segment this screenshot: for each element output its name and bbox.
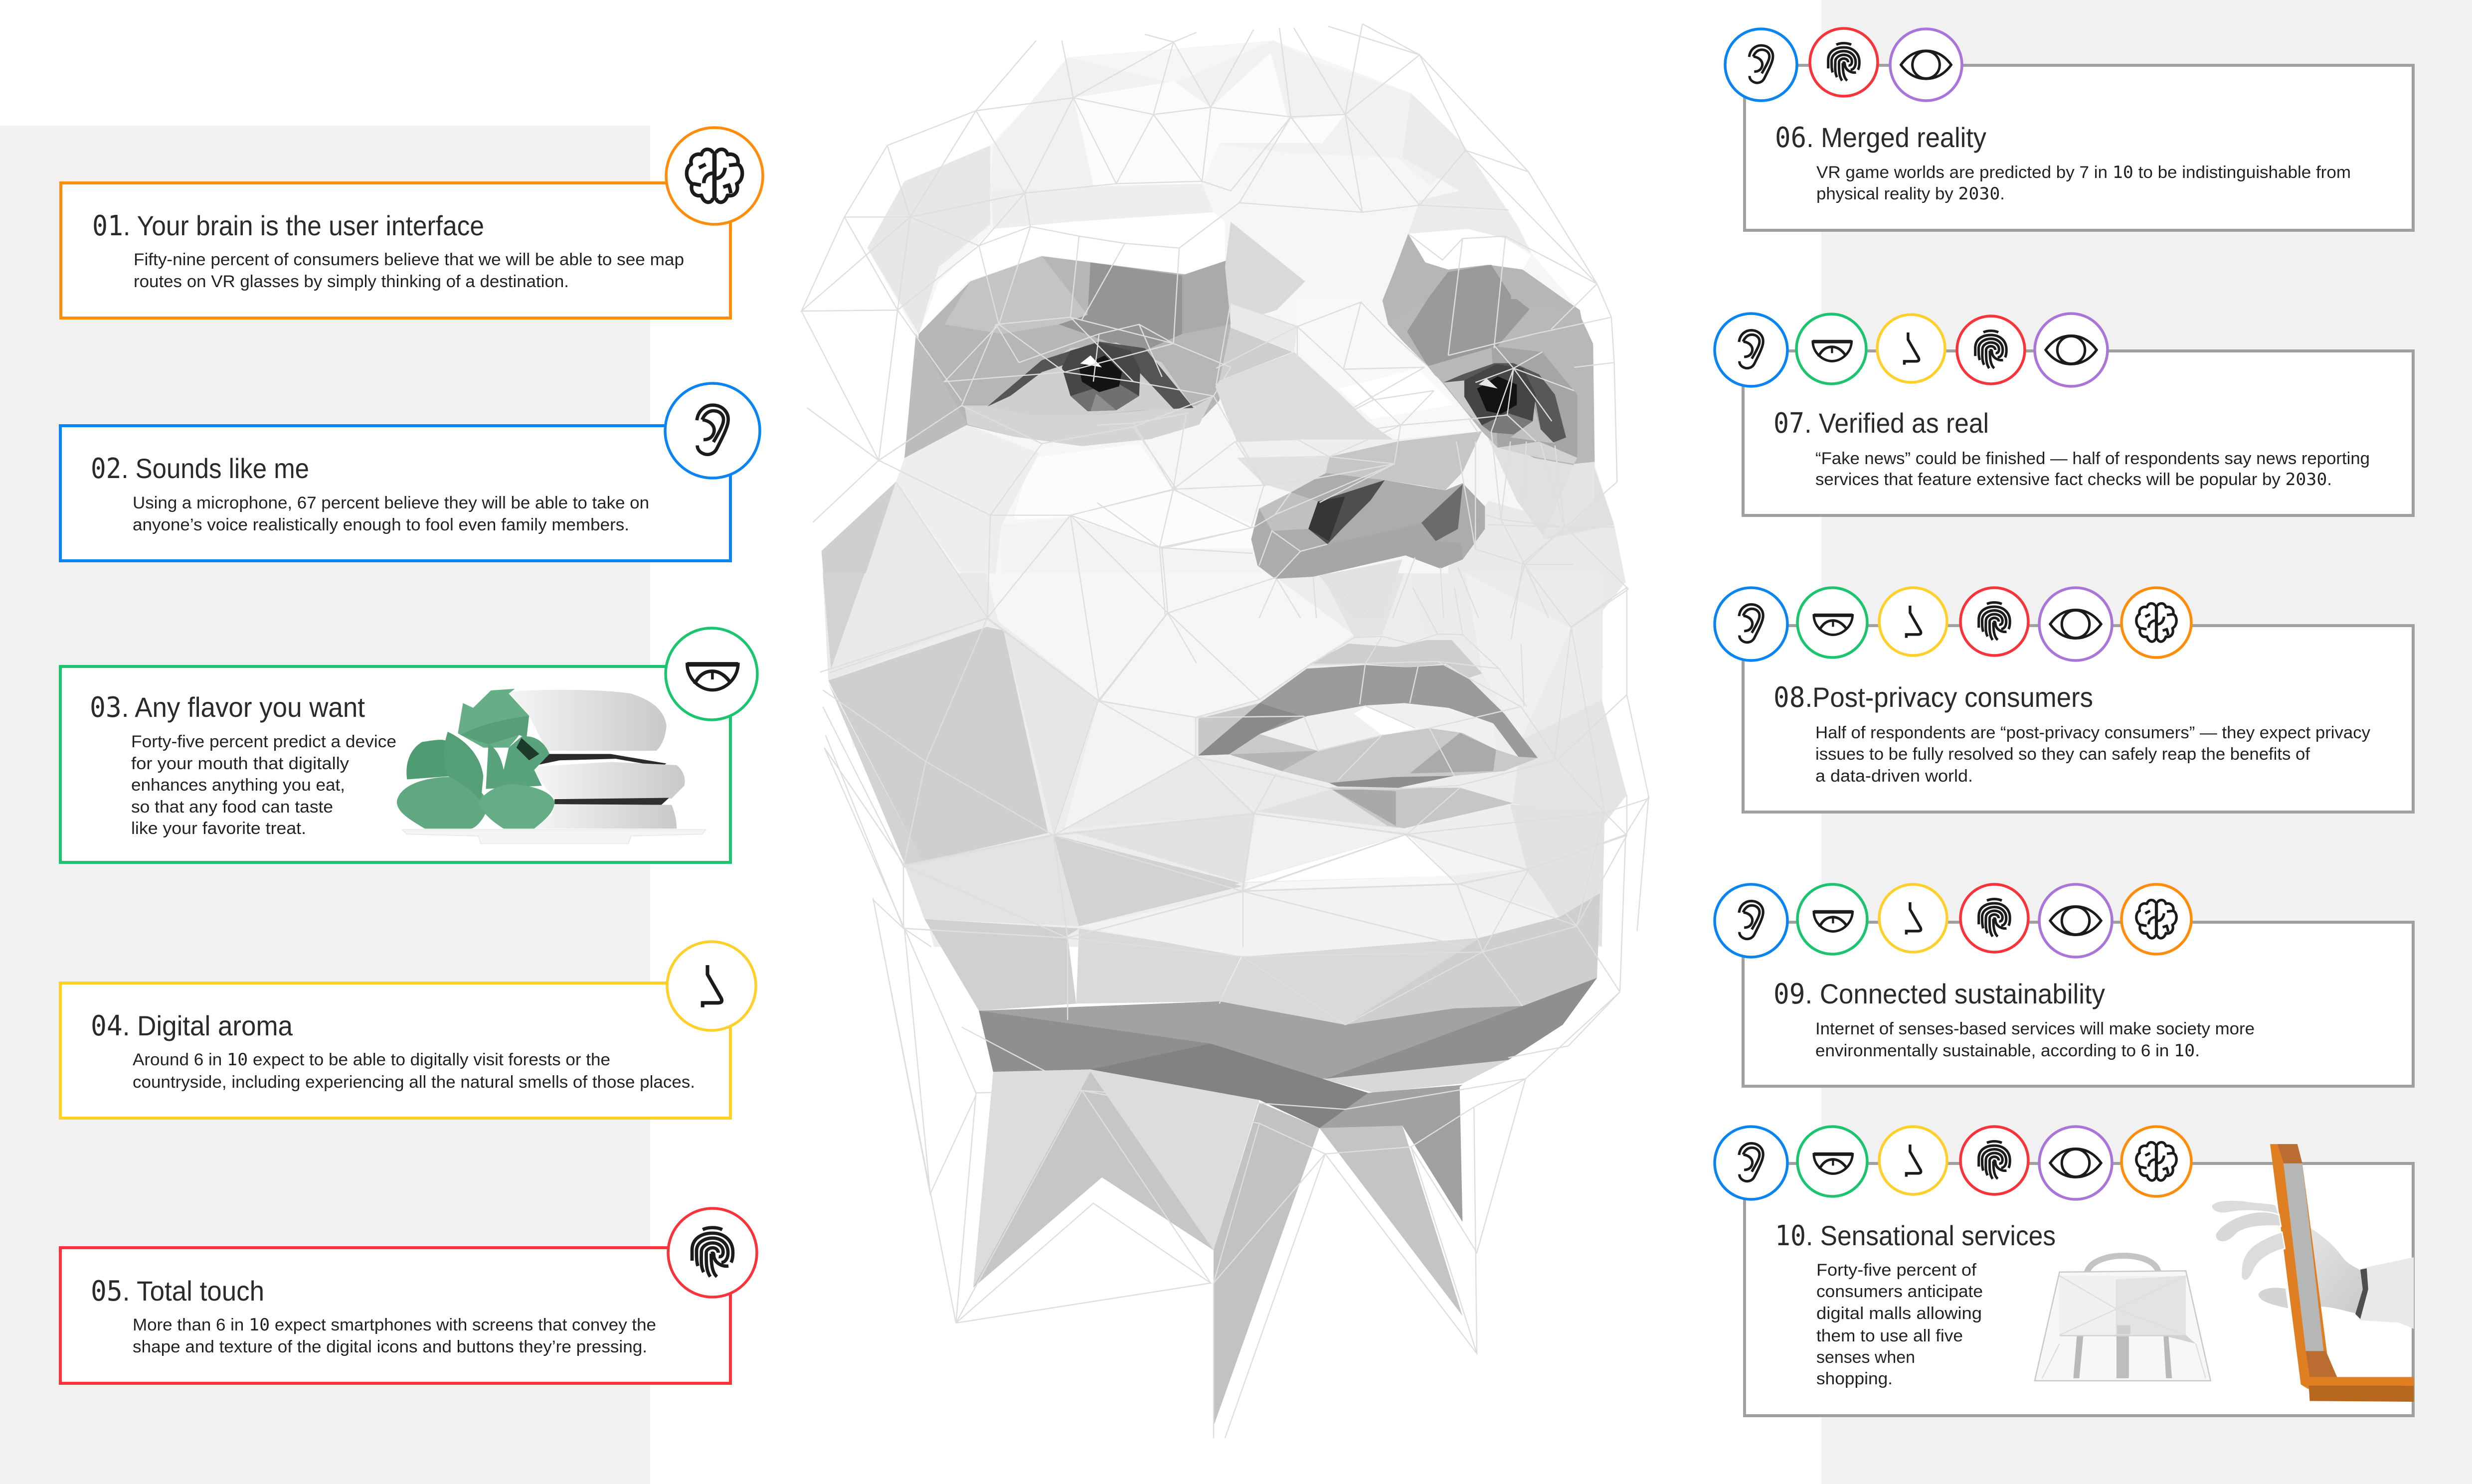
panel: 03 Any flavor you want xyxy=(60,628,757,862)
text block: 07 body: “Fake news” could be finished — half of respondents say news reporting xyxy=(1815,449,2370,468)
text block: 10 body: senses when xyxy=(1816,1348,1915,1367)
face: jaw and neck planes xyxy=(904,834,1600,1426)
heading: 02: 02. Sounds like me xyxy=(91,453,309,485)
face: wireframe mesh, mouth xyxy=(820,588,1649,947)
text block: 04 body: countryside, including experiencing all the natural smells of those places. xyxy=(133,1073,695,1092)
icons: all six senses xyxy=(1715,1127,2191,1199)
heading: 03: 03. Any flavor you want xyxy=(90,691,365,724)
panel: 04 Digital aroma xyxy=(60,942,756,1118)
text block: 02 body xyxy=(133,494,649,534)
icon: nose xyxy=(667,942,756,1030)
heading: 09: 09. Connected sustainability xyxy=(1773,978,2105,1010)
heading: 08: 08.Post-privacy consumers xyxy=(1773,681,2093,714)
heading: 04: 04. Digital aroma xyxy=(91,1010,293,1042)
text block: 10 body xyxy=(1816,1261,1983,1388)
icon: fingerprint xyxy=(668,1208,757,1297)
text block: 03 body: for your mouth that digitally xyxy=(131,754,349,773)
text block: 10 body: shopping. xyxy=(1816,1369,1893,1388)
text block: 09 body: environmentally sustainable, according to 6 in 10. xyxy=(1815,1041,2200,1061)
text block: 08 body xyxy=(1815,723,2370,786)
panel: 10 Sensational services xyxy=(1715,1127,2414,1416)
icons: ear, touch, sight xyxy=(1725,28,1962,101)
icons: all six senses xyxy=(1715,588,2191,660)
icons: ear, mouth, nose, touch, sight xyxy=(1715,314,2108,386)
face: upper planes xyxy=(822,40,1626,748)
icons: all six senses xyxy=(1715,884,2191,957)
text block: 09 body xyxy=(1815,1019,2255,1061)
heading: 06: 06. Merged reality xyxy=(1775,122,1986,154)
face: nose and right eye facets xyxy=(1215,299,1594,618)
text block: 03 body: Forty-five percent predict a device xyxy=(131,732,396,751)
text block: 03 body: so that any food can taste xyxy=(131,798,333,817)
panel: 09 Connected sustainability xyxy=(1715,884,2413,1086)
text block: 07 body xyxy=(1815,449,2370,490)
icon: mouth xyxy=(666,628,757,720)
heading: 07: 07. Verified as real xyxy=(1773,407,1989,440)
text block: 09 body: Internet of senses-based services will make society more xyxy=(1815,1019,2255,1038)
heading: 05: 05. Total touch xyxy=(91,1275,264,1308)
icon: ear xyxy=(665,383,760,478)
face: wireframe mesh, upper xyxy=(801,24,1628,701)
text block: 08 body: Half of respondents are “post-privacy consumers” — they expect privacy xyxy=(1815,723,2370,742)
heading: 01: 01. Your brain is the user interface xyxy=(92,210,484,242)
panel: 08 Post-privacy consumers xyxy=(1715,588,2413,812)
background: right grey panel xyxy=(1821,0,2472,1484)
face: lips xyxy=(1199,640,1538,828)
text block: 10 body: consumers anticipate xyxy=(1816,1282,1983,1301)
face: wireframe mesh, nose and right eye xyxy=(1097,302,1574,618)
right eye socket xyxy=(1542,462,1594,539)
face: cheeks and mouth area planes xyxy=(823,573,1627,947)
text block: 10 body: digital malls allowing xyxy=(1816,1304,1982,1323)
illustration: shopping bag wireframe xyxy=(2035,1256,2211,1381)
text block: 10 body: them to use all five xyxy=(1816,1326,1963,1345)
text block: 04 body xyxy=(133,1050,695,1092)
text block: 03 body: enhances anything you eat, xyxy=(131,776,345,795)
text block: 05 body xyxy=(133,1315,656,1356)
panel: 01 Your brain is the user interface xyxy=(61,128,763,318)
panel: 05 Total touch xyxy=(60,1208,757,1383)
text block: 06 body xyxy=(1816,163,2351,204)
panel: 07 Verified as real xyxy=(1715,314,2413,515)
text block: 06 body: physical reality by 2030. xyxy=(1816,184,2005,204)
text block: 01 body: routes on VR glasses by simply thinking of a destination. xyxy=(134,272,569,291)
text block: 07 body: services that feature extensive fact checks will be popular by 2030. xyxy=(1815,470,2332,490)
background: left grey panel xyxy=(0,126,650,1484)
text block: 08 body: issues to be fully resolved so they can safely reap the benefits of xyxy=(1815,745,2310,764)
text block: 03 body xyxy=(131,732,396,838)
text block: 02 body: Using a microphone, 67 percent believe they will be able to take on xyxy=(133,494,649,512)
panel: 06 Merged reality xyxy=(1725,28,2413,230)
icon: brain xyxy=(666,128,763,224)
text block: 08 body: a data-driven world. xyxy=(1815,767,1973,786)
heading: 10: 10. Sensational services xyxy=(1775,1220,2056,1252)
face: eye sockets, bridge and left eye xyxy=(904,222,1591,465)
text block: 04 body: Around 6 in 10 expect to be able to digitally visit forests or the xyxy=(133,1050,610,1070)
text block: 03 body: like your favorite treat. xyxy=(131,819,306,838)
text block: 02 body: anyone’s voice realistically enough to fool even family members. xyxy=(133,515,629,534)
illustration: orange laptop with reaching hand xyxy=(2212,1144,2414,1402)
text block: 05 body: More than 6 in 10 expect smartphones with screens that convey the xyxy=(133,1315,656,1335)
text block: 01 body xyxy=(134,250,684,291)
face: wireframe mesh, jaw and neck xyxy=(824,748,1648,1438)
illustration: low-poly face xyxy=(801,24,1649,1438)
illustration: burger with green leaves on a plate xyxy=(397,689,706,843)
text block: 10 body: Forty-five percent of xyxy=(1816,1261,1977,1280)
text block: 06 body: VR game worlds are predicted by 7 in 10 to be indistinguishable from xyxy=(1816,163,2351,182)
nose xyxy=(1320,559,1402,618)
text block: 05 body: shape and texture of the digital icons and buttons they’re pressing. xyxy=(133,1337,647,1356)
text block: 01 body: Fifty-nine percent of consumers believe that we will be able to see map xyxy=(134,250,684,269)
panel: 02 Sounds like me xyxy=(60,383,760,561)
